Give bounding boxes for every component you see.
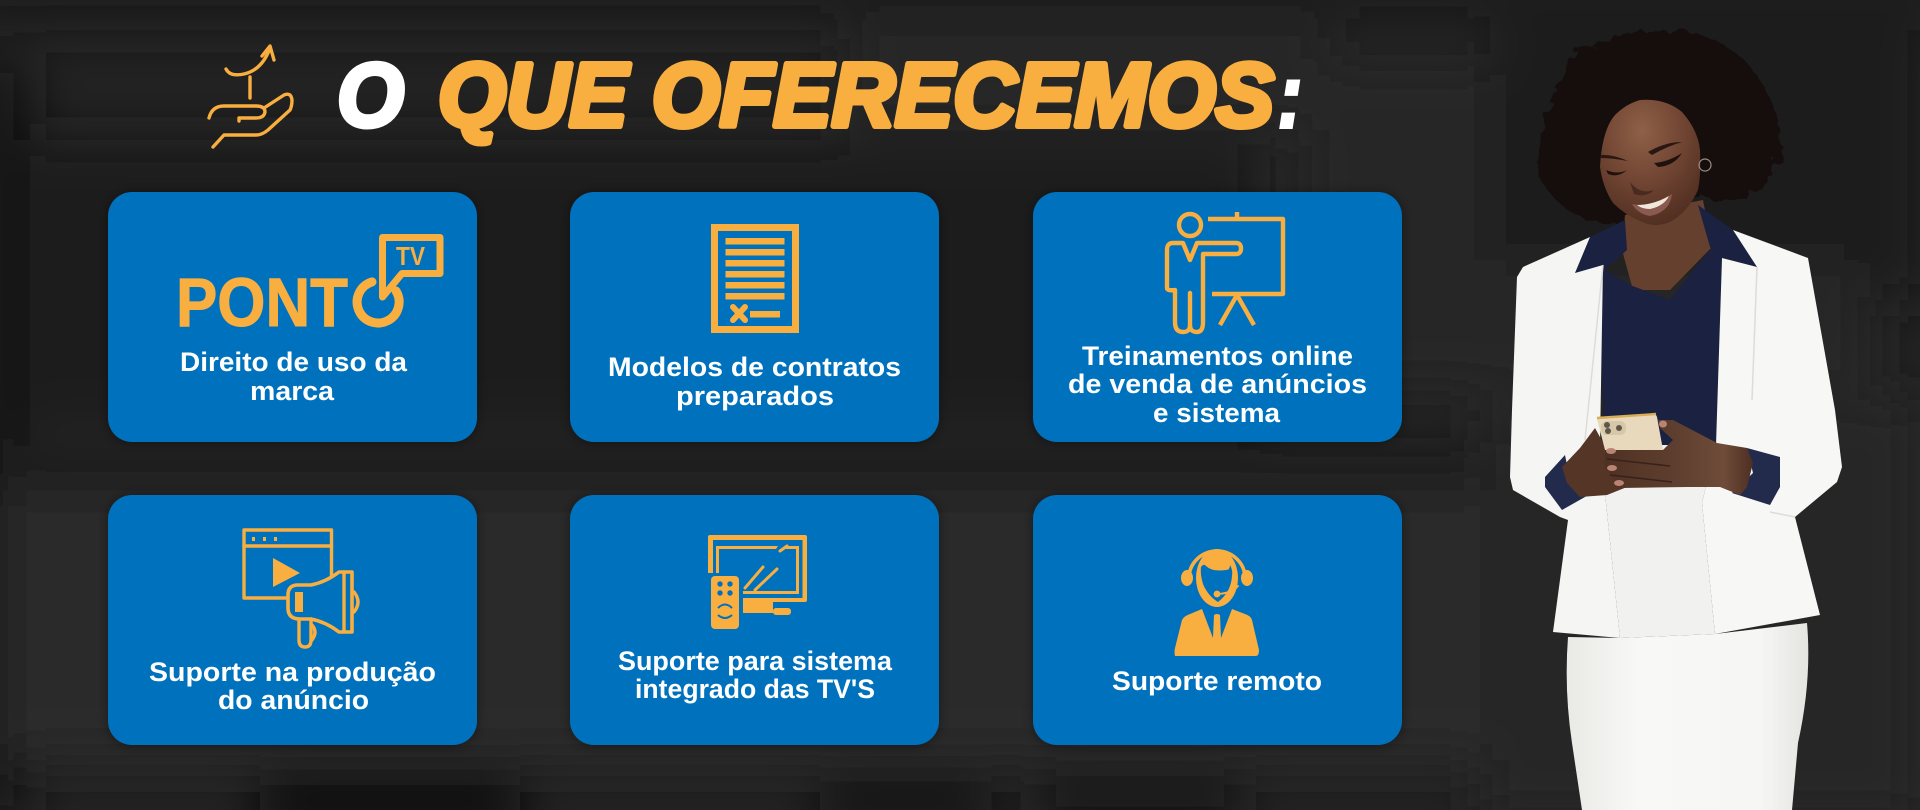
title <box>209 46 1302 147</box>
shirt collar left <box>1575 220 1627 273</box>
card text: marca <box>250 376 335 406</box>
icon: video window with megaphone <box>244 530 358 647</box>
card text <box>618 646 893 704</box>
skirt <box>1567 623 1808 810</box>
icon: contract document <box>714 228 796 330</box>
panel: suporte na producao <box>108 495 477 745</box>
hair <box>1538 30 1781 225</box>
jacket left <box>1510 237 1620 638</box>
card text: preparados <box>676 381 834 411</box>
logo: Ponto TV <box>176 238 440 341</box>
right hand <box>1605 420 1753 495</box>
logo: Ponto TV: PONT <box>176 264 348 341</box>
card text: Suporte para sistema <box>618 646 893 676</box>
card text: integrado das TV'S <box>635 674 875 704</box>
left cuff <box>1545 455 1592 510</box>
dark shirt <box>1597 250 1722 445</box>
finger shadows and nails <box>1606 420 1672 486</box>
card text: Suporte remoto <box>1112 666 1322 696</box>
icon: tv with remote <box>708 535 807 629</box>
card text <box>608 352 901 411</box>
shirt collar right <box>1698 205 1757 267</box>
panel: modelos de contratos <box>570 192 939 442</box>
panel: suporte sistema integrado <box>570 495 939 745</box>
neck and chest <box>1622 200 1712 290</box>
card text: Suporte na produção <box>149 657 436 687</box>
icon: hand with growth arrow <box>209 46 292 147</box>
title colon: : <box>1278 47 1302 147</box>
icon: support agent with headset <box>1174 549 1259 656</box>
panel: direito de uso da marca <box>108 192 477 442</box>
facial features <box>1600 142 1711 216</box>
card text <box>180 347 408 406</box>
panel: suporte remoto <box>1033 495 1402 745</box>
icon: presenter with board <box>1167 212 1283 332</box>
card text: de venda de anúncios <box>1068 369 1367 399</box>
phone <box>1597 414 1663 450</box>
card text: e sistema <box>1153 398 1281 428</box>
right cuff <box>1732 448 1780 505</box>
card text: Modelos de contratos <box>608 352 901 382</box>
jacket fold shading <box>1585 265 1795 517</box>
left hand <box>1562 428 1627 497</box>
panel: treinamentos online <box>1033 192 1402 442</box>
card text <box>1068 341 1367 428</box>
woman in white suit using phone <box>1510 30 1842 810</box>
card text: Treinamentos online <box>1082 341 1353 371</box>
blouse waist <box>1600 445 1716 638</box>
card text: do anúncio <box>218 685 369 715</box>
card text <box>149 657 436 715</box>
logo: Ponto TV: TV <box>396 241 426 271</box>
jacket right <box>1702 230 1842 634</box>
face <box>1600 100 1700 225</box>
title words: QUE OFERECEMOS: QUE OFERECEMOS <box>438 46 1274 146</box>
card text: Direito de uso da <box>180 347 408 377</box>
title word: O: O <box>337 46 404 146</box>
